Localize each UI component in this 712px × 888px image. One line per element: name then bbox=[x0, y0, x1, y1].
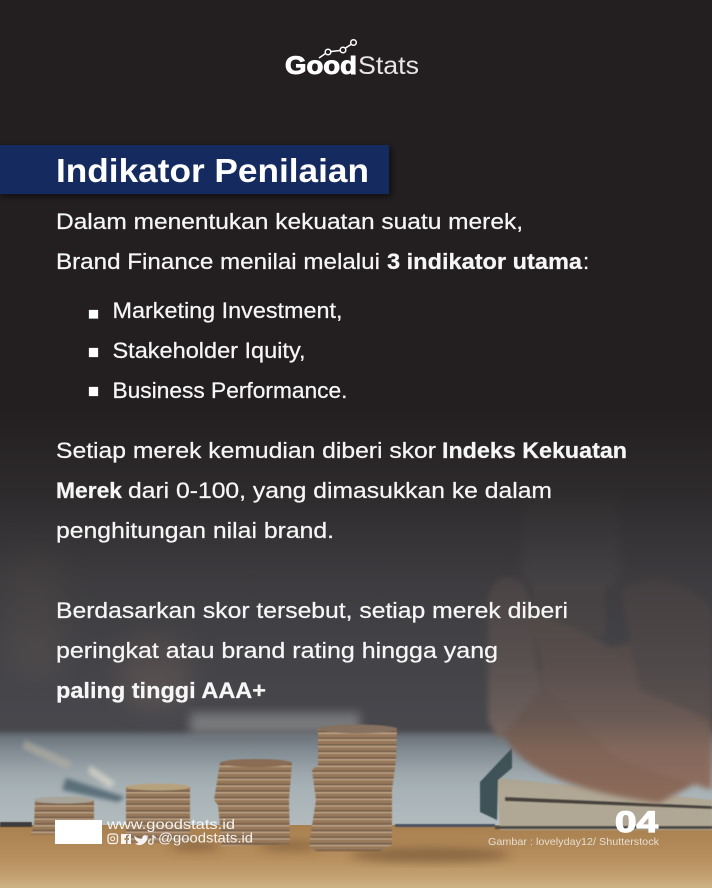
logo: GoodStats: Good bbox=[285, 52, 357, 80]
bullet list: three indicators bbox=[89, 298, 348, 403]
paragraph: brand rating bbox=[56, 598, 568, 703]
paragraph: brand rating: peringkat atau brand rating hingga yang bbox=[56, 638, 498, 663]
intro paragraph: : bbox=[583, 249, 589, 274]
footer website and social handles: @goodstats.id bbox=[158, 830, 253, 846]
footer website and social handles bbox=[106, 816, 253, 846]
coin held in fingers bbox=[522, 495, 620, 590]
logo chart line icon bbox=[319, 40, 356, 58]
image credit: Gambar : lovelyday12/ Shutterstock bbox=[488, 836, 660, 848]
page number: 04 bbox=[615, 806, 658, 839]
intro paragraph: 3 indikator utama bbox=[387, 249, 583, 274]
title banner: Indikator Penilaian bbox=[0, 145, 392, 197]
intro paragraph: Dalam menentukan kekuatan suatu merek, bbox=[56, 209, 523, 234]
book bbox=[480, 748, 712, 830]
intro paragraph: Brand Finance menilai melalui bbox=[56, 249, 380, 274]
logo: GoodStats bbox=[285, 40, 419, 80]
logo: GoodStats: Stats bbox=[358, 52, 419, 80]
paragraph: brand rating: Berdasarkan skor tersebut, setiap merek diberi bbox=[56, 598, 568, 623]
paragraph: Indeks Kekuatan Merek: dari 0-100, yang dimasukkan ke dalam bbox=[128, 478, 552, 503]
bullet list: three indicators: Stakeholder Iquity, bbox=[112, 338, 306, 363]
social icons bbox=[108, 834, 156, 845]
footer website and social handles: www.goodstats.id bbox=[106, 816, 235, 832]
bullet list: three indicators: Business Performance. bbox=[112, 378, 348, 403]
desk surface bbox=[0, 825, 712, 888]
blurred background shape bbox=[5, 545, 65, 675]
intro paragraph bbox=[56, 209, 589, 274]
bullet list: three indicators: Marketing Investment, bbox=[112, 298, 342, 323]
paragraph: Indeks Kekuatan Merek bbox=[56, 438, 627, 543]
paragraph: Indeks Kekuatan Merek: Merek bbox=[56, 478, 123, 503]
pen bbox=[22, 740, 125, 802]
coin stack 3 bbox=[214, 759, 292, 846]
hand bbox=[488, 578, 712, 803]
shadows under coins bbox=[170, 842, 510, 862]
coin stack 2 bbox=[126, 784, 190, 843]
paragraph: Indeks Kekuatan Merek: penghitungan nilai brand. bbox=[56, 518, 334, 543]
paragraph: Indeks Kekuatan Merek: Setiap merek kemudian diberi skor bbox=[56, 438, 436, 463]
paragraph: Indeks Kekuatan Merek: Indeks Kekuatan bbox=[442, 438, 627, 463]
coin stack 1 bbox=[30, 796, 94, 835]
footer logo placeholder bbox=[55, 820, 102, 844]
title banner: Indikator Penilaian: Indikator Penilaian bbox=[56, 152, 369, 189]
coin stack 4 bbox=[309, 724, 397, 851]
paragraph: brand rating: paling tinggi AAA+ bbox=[56, 678, 266, 703]
